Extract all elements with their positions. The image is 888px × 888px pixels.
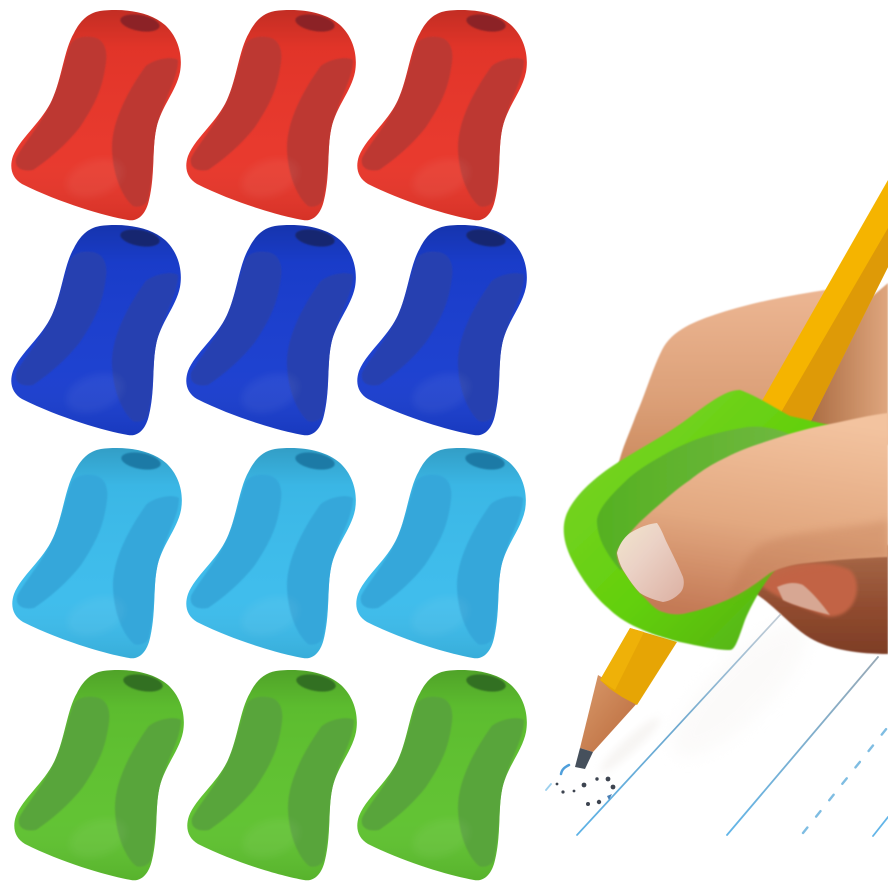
green grip on hand — [564, 390, 830, 650]
hand: lower fingers — [740, 545, 888, 654]
middle finger tip — [760, 563, 857, 617]
pencil: upper barrel — [755, 180, 888, 433]
hand: index finger — [618, 288, 840, 470]
thumb shading — [727, 520, 888, 600]
thumbnail — [617, 523, 684, 602]
row: green grips — [14, 670, 527, 880]
pencil shadow — [596, 713, 664, 777]
hand: thumb — [617, 413, 888, 614]
hand: palm behind pencil — [770, 283, 888, 445]
row: red grips — [11, 10, 527, 220]
fingernail: middle finger — [777, 583, 830, 615]
row: blue grips — [11, 225, 527, 435]
traced dots — [556, 777, 615, 806]
writing paper lines — [546, 605, 888, 836]
grip inner cavity — [597, 427, 800, 570]
pencil: wood cone — [580, 675, 640, 752]
grip grid — [11, 10, 527, 880]
row: light blue grips — [12, 448, 526, 658]
pencil: lower barrel and tip — [575, 628, 677, 769]
pencil: lead — [575, 748, 593, 769]
